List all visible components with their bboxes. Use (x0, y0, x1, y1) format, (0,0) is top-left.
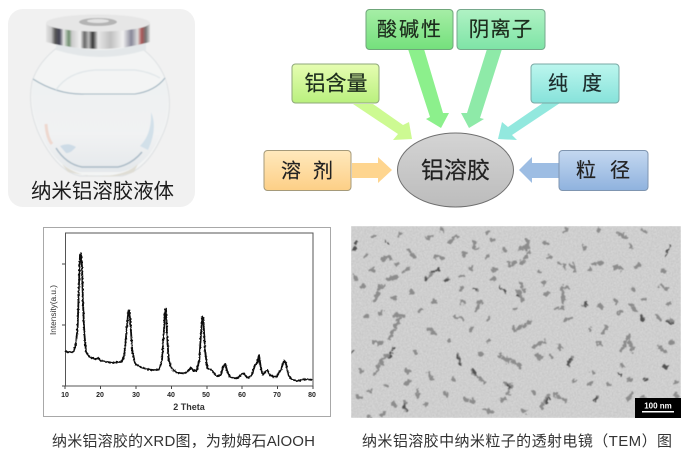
photo label: 纳米铝溶胶液体 (31, 180, 174, 203)
scale bar: 100 nm: 100 nm (644, 402, 672, 410)
box: purity: 纯 (548, 72, 568, 95)
x-axis tick labels: 50 (202, 392, 210, 399)
caption: TEM: 纳米铝溶胶中纳米粒子的透射电镜（TEM）图 (362, 432, 672, 450)
arrow: acidity to sol (408, 49, 449, 128)
chart frame (44, 228, 330, 416)
arrow: purity to sol (498, 103, 560, 140)
panel: XRD chart (44, 228, 330, 416)
micrograph background (351, 226, 681, 418)
nanoparticles (352, 228, 678, 417)
box: particle size (559, 150, 648, 190)
box: aluminium content (292, 64, 379, 103)
arrow: solvent to sol (352, 157, 392, 183)
ellipse: alumina sol (398, 133, 514, 207)
box: acidity: 酸碱性 (377, 18, 443, 41)
panel: photo of nano alumina sol liquid (8, 9, 195, 207)
box: solvent: 剂 (313, 160, 333, 182)
x-axis tick labels (61, 392, 316, 399)
scale bar: 100 nm (635, 398, 681, 418)
XRD curve (65, 253, 312, 381)
x-axis tick labels: 80 (308, 392, 316, 399)
photo background (8, 9, 195, 207)
x-axis tick labels: 10 (61, 392, 69, 399)
box: purity: 度 (582, 72, 602, 95)
box: acidity (366, 10, 453, 50)
box: anion: 阴离子 (469, 18, 533, 41)
ellipse: alumina sol: 铝溶胶 (421, 157, 490, 183)
x-axis tick labels: 40 (167, 392, 175, 399)
arrow: anion to sol (461, 49, 502, 128)
icon: glass jar with liquid (30, 14, 169, 176)
box: purity (531, 64, 619, 103)
plot axes box (66, 233, 313, 386)
y-axis title: Intensity(a.u.) (49, 285, 58, 335)
box: particle size: 径 (610, 159, 630, 182)
box: particle size: 粒 (576, 159, 596, 182)
box: solvent: 溶 (281, 160, 301, 182)
panel: TEM micrograph (351, 226, 681, 418)
x-axis title: 2 Theta (173, 402, 206, 412)
x-axis tick labels: 70 (273, 392, 281, 399)
box: aluminium content: 铝含量 (304, 72, 368, 96)
box: solvent (264, 150, 351, 190)
diagram: factors affecting alumina sol (264, 10, 648, 207)
axis ticks (62, 264, 313, 389)
x-axis tick labels: 60 (238, 392, 246, 399)
arrow: aluminium content to sol (353, 104, 412, 140)
x-axis tick labels: 30 (132, 392, 140, 399)
arrow: particle size to sol (519, 157, 559, 183)
x-axis tick labels: 20 (96, 392, 104, 399)
box: anion (457, 10, 545, 50)
caption: XRD: 纳米铝溶胶的XRD图，为勃姆石AlOOH (52, 433, 315, 450)
